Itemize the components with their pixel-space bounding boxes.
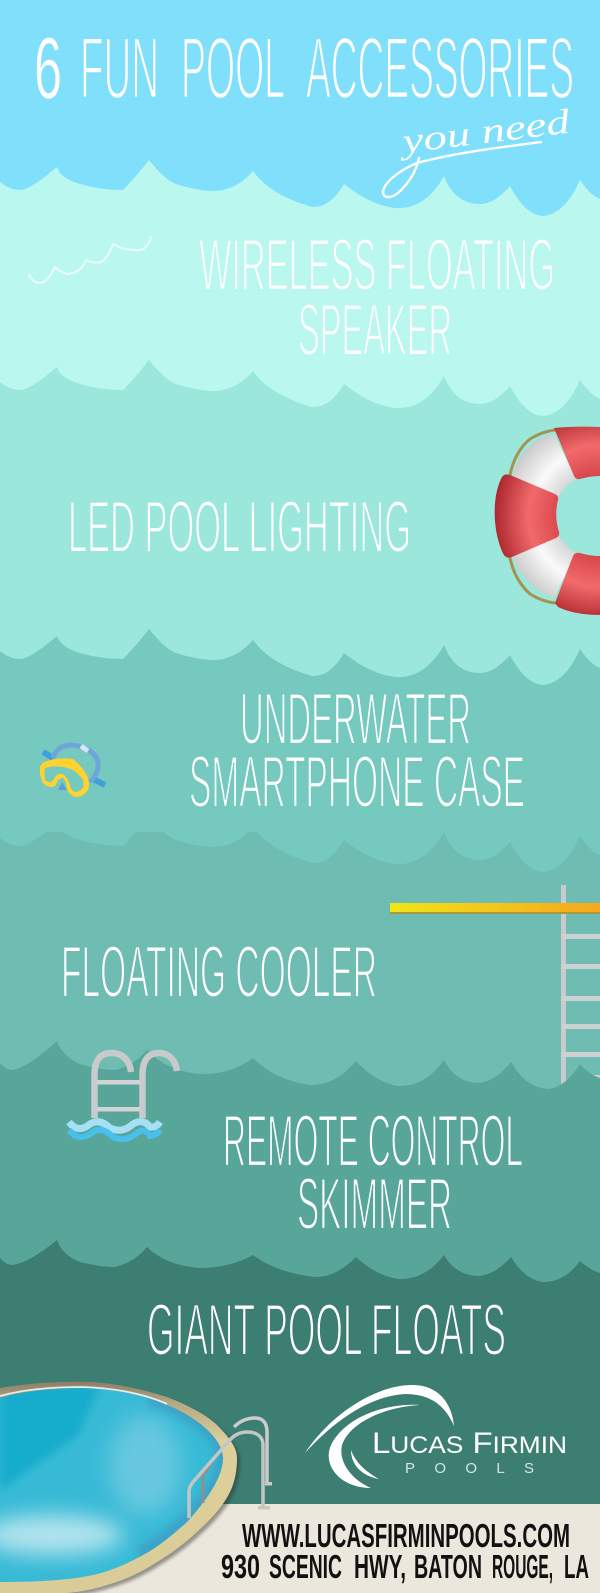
wave band 2 (0, 360, 600, 1593)
heading: remote control skimmer (223, 1101, 523, 1245)
title (34, 20, 574, 117)
ladder rails (234, 1418, 267, 1483)
logo swoosh: inner (351, 1450, 379, 1479)
icon: pool (0, 1382, 272, 1593)
red section: bottom (555, 553, 600, 615)
subtitle: you need: you need (396, 102, 572, 161)
icon: white wave squiggle (29, 237, 151, 283)
footer: address (221, 1548, 589, 1585)
icon: pool ladder (69, 1053, 177, 1139)
pool water (0, 1388, 223, 1582)
wave band 4 (0, 832, 600, 1089)
wave band 5 (0, 1041, 600, 1593)
logo swoosh: outer (305, 1385, 454, 1453)
footer: address: 930 (221, 1548, 260, 1585)
logo subline: POOLS (405, 1460, 534, 1477)
icon: diving board plank (390, 903, 600, 914)
white ring sections (510, 434, 576, 598)
logo swoosh: middle (329, 1405, 420, 1488)
subtitle: you need (383, 102, 572, 197)
rim shadow (3, 1385, 240, 1593)
pool rim (0, 1382, 237, 1593)
rope (510, 430, 555, 603)
icon: diving board ladder (561, 885, 600, 1085)
red section: top (554, 427, 600, 479)
title: 6 (34, 20, 62, 117)
logo: Lucas Firmin Pools (305, 1385, 567, 1488)
icon: swim goggles (40, 745, 105, 797)
title: POOL (181, 20, 285, 117)
logo wordmark: LUCAS FIRMIN (372, 1427, 567, 1460)
wave band 6 (0, 1240, 600, 1593)
wave band 3 (0, 629, 600, 1593)
title: FUN (80, 20, 159, 117)
heading: underwater smartphone case (189, 679, 525, 823)
water waves (69, 1122, 160, 1130)
heading: wireless floating speaker (199, 225, 555, 371)
red section: left (495, 474, 559, 558)
icon: life ring (495, 427, 600, 615)
footer: sand band (0, 1504, 600, 1593)
footer: address: HWY, (354, 1548, 406, 1585)
rim highlight (0, 1387, 167, 1404)
footer: address: BATON (414, 1548, 482, 1585)
footer: address: SCENIC (269, 1548, 342, 1585)
